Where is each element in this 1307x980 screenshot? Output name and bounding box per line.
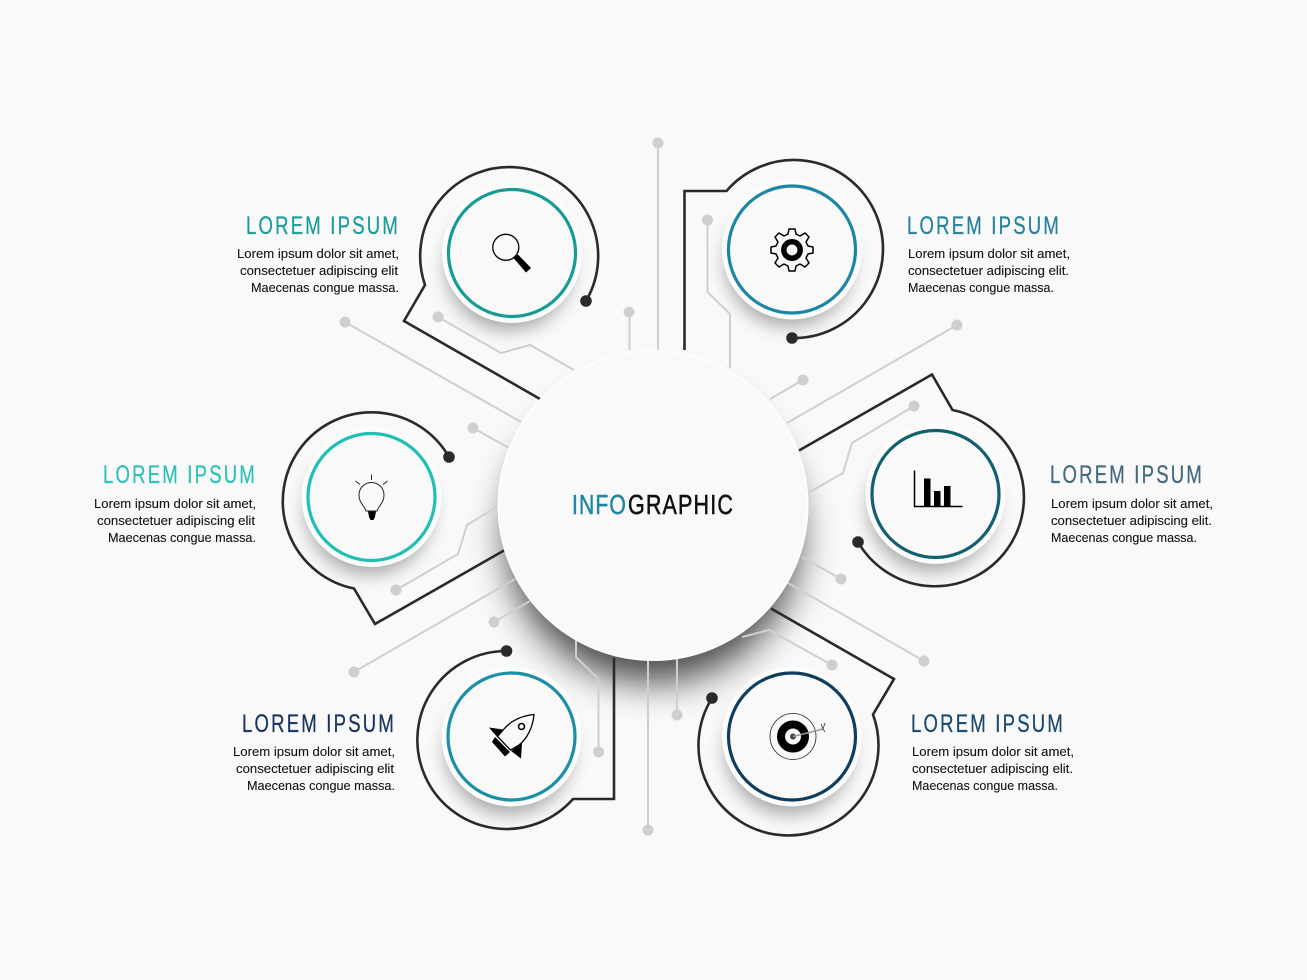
text block: bottom left [233,710,396,793]
text block: top left: Lorem ipsum dolor sit amet, [237,246,399,261]
panel: bottom left circle [417,645,614,829]
text block: left: LOREM IPSUM [103,461,257,489]
text block: left: consectetuer adipiscing elit [97,513,255,528]
text block: bottom right: consectetuer adipiscing elit. [912,761,1073,776]
text block: right: Lorem ipsum dolor sit amet, [1051,496,1213,511]
title [572,489,734,520]
text block: top right: LOREM IPSUM [907,212,1061,240]
title: GRAPHIC [628,489,734,520]
circuit lines [340,138,962,836]
panel: top right circle [684,160,883,350]
text block: bottom left: Lorem ipsum dolor sit amet, [233,744,395,759]
text block: top right [907,212,1070,295]
text block: top left: LOREM IPSUM [246,212,400,240]
icon: target [770,714,825,760]
text block: right: LOREM IPSUM [1050,461,1204,489]
text block: top left: Maecenas congue massa. [251,280,399,295]
text block: bottom right: LOREM IPSUM [911,710,1065,738]
panel: bottom right circle [698,608,894,835]
text block: top right: Lorem ipsum dolor sit amet, [908,246,1070,261]
icon: light bulb [356,474,388,520]
panel: top left circle [404,167,598,399]
text block: left [94,461,257,545]
title: INFO [572,489,627,520]
text block: bottom left: Maecenas congue massa. [247,778,395,793]
shadows under circles [306,200,995,814]
text block: top right: consectetuer adipiscing elit. [908,263,1069,278]
text block: top left [237,212,400,295]
text block: bottom right: Maecenas congue massa. [912,778,1058,793]
icon: bar chart [914,470,962,506]
panel: left circle [283,412,504,624]
icon: rocket [489,714,534,758]
text block: bottom left: consectetuer adipiscing elit [236,761,394,776]
text block: right: consectetuer adipiscing elit. [1051,513,1212,528]
text block: left: Lorem ipsum dolor sit amet, [94,496,256,511]
text block: top left: consectetuer adipiscing elit [240,263,398,278]
text block: bottom right [911,710,1074,793]
text block: right [1050,461,1213,545]
text block: left: Maecenas congue massa. [108,530,256,545]
text block: right: Maecenas congue massa. [1051,530,1197,545]
icon: gear [771,229,813,271]
text block: bottom right: Lorem ipsum dolor sit amet, [912,744,1074,759]
icon: magnifier [493,234,531,272]
panel: right circle [799,374,1024,586]
text block: bottom left: LOREM IPSUM [242,710,396,738]
text block: top right: Maecenas congue massa. [908,280,1054,295]
center circle [498,351,808,660]
